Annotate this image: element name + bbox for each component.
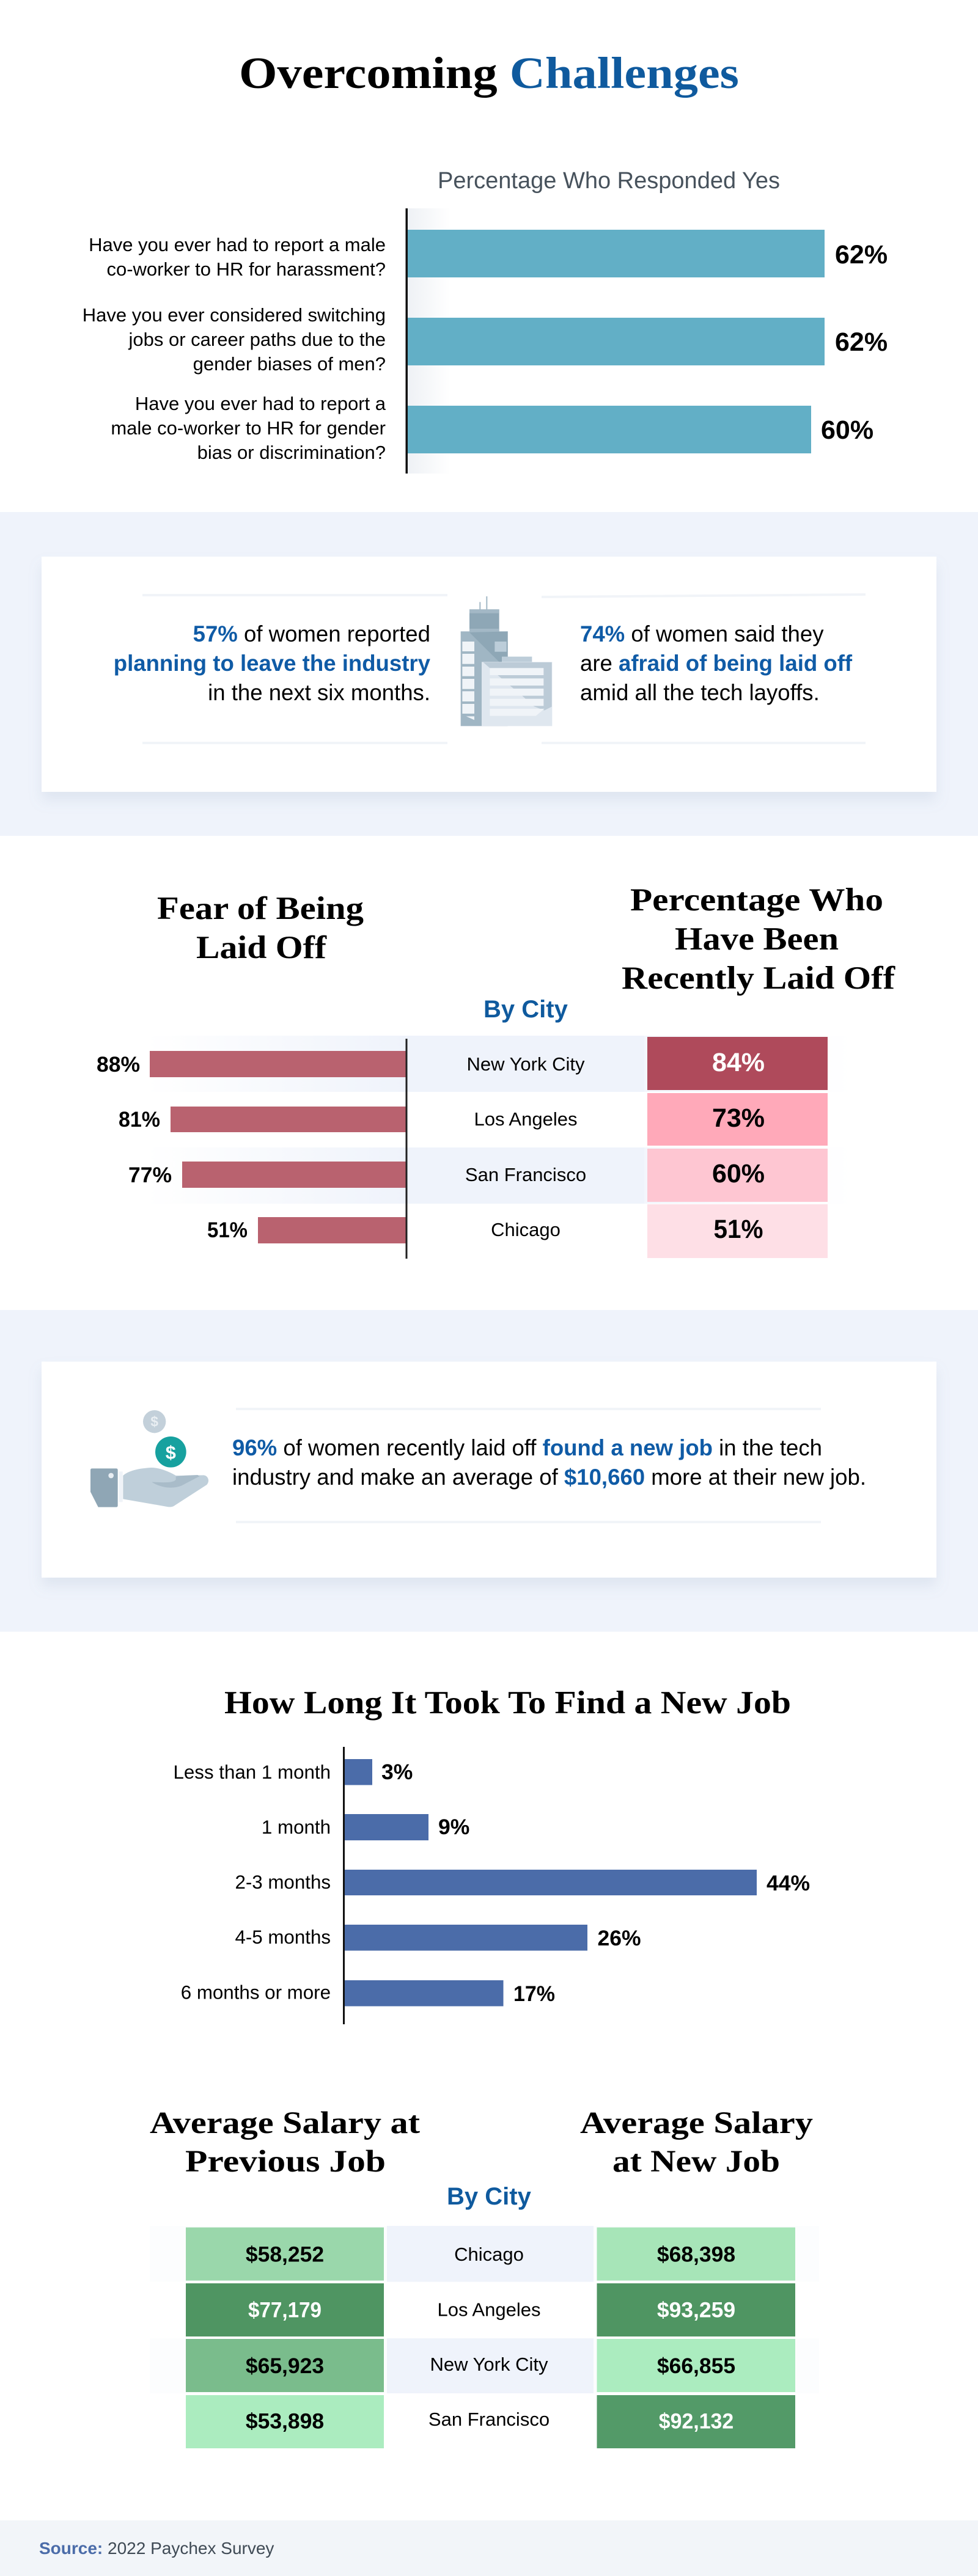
- salary cell: New York City previous: $65,923: [246, 2354, 324, 2378]
- value 88%: 88%: [97, 1052, 140, 1077]
- bar: 2-3 months 44%: [345, 1870, 757, 1895]
- subheading: by city: By City: [483, 996, 568, 1023]
- callout text: 57% planning to leave: planning to leave the industry: [114, 651, 431, 676]
- salary cell: Los Angeles new: [597, 2283, 795, 2336]
- question label 3: male co-worker to HR for gender: [111, 417, 386, 439]
- question label 2: jobs or career paths due to the: [128, 329, 386, 350]
- heat cell: San Francisco 60%: [647, 1149, 828, 1202]
- city label: New York City: New York City: [430, 2354, 548, 2375]
- salary cell: San Francisco previous: [186, 2395, 384, 2448]
- panel: how long it took to find a new job chart: [174, 1685, 810, 2024]
- bar: less than 1 month 3%: [345, 1759, 372, 1785]
- salary cell: Los Angeles previous: [186, 2283, 384, 2336]
- salary cell: Los Angeles new: $93,259: [657, 2297, 735, 2322]
- heading: previous job: Average Salary at: [150, 2106, 420, 2140]
- callout card: [42, 1361, 936, 1578]
- heading: fear of being laid off: Fear of Being: [157, 891, 364, 926]
- label: 6 months or more: 6 months or more: [181, 1982, 331, 2003]
- bar: report harassment 62%: [408, 230, 825, 277]
- callout text: 57% planning to leave: in the next six months.: [208, 680, 430, 705]
- label: 4-5 months: 4-5 months: [235, 1927, 331, 1948]
- salary cell: Chicago new: [597, 2228, 795, 2280]
- heading: percentage recently laid off: Recently Laid Off: [622, 961, 895, 996]
- bar: San Francisco fear 77%: [182, 1162, 406, 1188]
- heat cell: New York City 84%: [647, 1037, 828, 1090]
- subheading: by city: By City: [447, 2183, 532, 2210]
- question label 2: gender biases of men?: [193, 353, 386, 375]
- value 26%: 26%: [598, 1926, 641, 1950]
- salary cell: San Francisco previous: $53,898: [246, 2409, 324, 2433]
- value 62%: 62%: [835, 327, 888, 357]
- salary cell: Los Angeles previous: $77,179: [248, 2297, 322, 2322]
- icon: office buildings: [461, 596, 552, 726]
- heat cell: San Francisco 60%: 60%: [712, 1159, 765, 1188]
- value 9%: 9%: [438, 1815, 469, 1839]
- panel: average salary by city table: [150, 2106, 819, 2448]
- value 44%: 44%: [767, 1871, 810, 1895]
- label: less than 1 month: Less than 1 month: [174, 1762, 331, 1783]
- bar: Los Angeles fear 81%: [171, 1107, 406, 1132]
- heat cell: Los Angeles 73%: [647, 1093, 828, 1146]
- question label 3: Have you ever had to report a: [135, 393, 386, 414]
- city label: Los Angeles: Los Angeles: [438, 2299, 540, 2321]
- value 17%: 17%: [513, 1981, 555, 2006]
- question label 1: Have you ever had to report a male: [89, 234, 386, 255]
- value 81%: 81%: [119, 1107, 160, 1132]
- heading: new job: at New Job: [612, 2145, 780, 2179]
- callout text: 74% afraid of layoffs: amid all the tech layoffs.: [580, 680, 820, 705]
- footer: source: Source: 2022 Paychex Survey: [39, 2539, 274, 2558]
- salary cell: Chicago previous: [186, 2228, 384, 2280]
- callout text: 57% planning to leave: 57% of women reported: [193, 621, 430, 646]
- city label: Chicago: Chicago: [491, 1219, 561, 1240]
- label: 2-3 months: 2-3 months: [235, 1872, 331, 1893]
- heading: percentage recently laid off: Have Been: [675, 921, 839, 957]
- callout text: 96% found a new job: industry and make an average of $10,660 more at their new job.: [232, 1465, 866, 1490]
- heat cell: Chicago 51%: [647, 1204, 828, 1258]
- title: Overcoming Challenges: [239, 48, 739, 98]
- salary cell: New York City new: [597, 2339, 795, 2392]
- icon: hand with coins: $: [166, 1442, 176, 1463]
- heat cell: Chicago 51%: 51%: [714, 1215, 763, 1244]
- value 60%: 60%: [821, 415, 873, 445]
- bar: switching careers 62%: [408, 318, 825, 365]
- icon: hand with coins: $: [150, 1414, 158, 1430]
- city label: Los Angeles: Los Angeles: [474, 1108, 577, 1130]
- label: 1 month: 1 month: [262, 1817, 331, 1838]
- salary cell: New York City new: $66,855: [657, 2354, 735, 2378]
- bar: 4-5 months 26%: [345, 1925, 587, 1950]
- callout text: 96% found a new job: 96% of women recently laid off found a new job in the tech: [232, 1435, 822, 1460]
- salary cell: Chicago previous: $58,252: [246, 2242, 324, 2267]
- heading: How Long It Took To Find a New Job: [224, 1685, 791, 1721]
- heading: new job: Average Salary: [580, 2106, 813, 2140]
- heat cell: New York City 84%: 84%: [712, 1048, 765, 1077]
- city label: New York City: New York City: [467, 1053, 585, 1075]
- heat cell: Los Angeles 73%: 73%: [712, 1103, 765, 1133]
- heading: fear of being laid off: Laid Off: [196, 930, 327, 965]
- bar: 1 month 9%: [345, 1814, 428, 1840]
- salary cell: New York City previous: [186, 2339, 384, 2392]
- question label 3: bias or discrimination?: [197, 442, 386, 463]
- panel: industry callout background: [0, 512, 978, 836]
- panel: new job callout background: [0, 1310, 978, 1631]
- salary cell: Chicago new: $68,398: [657, 2242, 735, 2267]
- footer: source: [0, 2520, 978, 2576]
- bar: New York City fear 88%: [150, 1051, 406, 1077]
- value 3%: 3%: [381, 1760, 413, 1784]
- question label 1: co-worker to HR for harassment?: [106, 258, 386, 280]
- chart subtitle: Percentage Who Responded Yes: [438, 168, 780, 194]
- panel: fear of being laid off by city: [97, 882, 895, 1259]
- bar: report bias 60%: [408, 406, 811, 453]
- callout text: 74% afraid of layoffs: 74% of women said they: [580, 621, 824, 646]
- callout text: 74% afraid of layoffs: are afraid of being laid off: [580, 651, 852, 676]
- bar: Chicago fear 51%: [258, 1217, 406, 1243]
- city label: San Francisco: San Francisco: [465, 1164, 586, 1185]
- icon: hand with coins: [90, 1410, 208, 1507]
- panel: percentage who responded yes chart: [83, 168, 888, 474]
- value 51%: 51%: [207, 1218, 248, 1242]
- question label 2: Have you ever considered switching: [83, 304, 386, 326]
- heading: percentage recently laid off: Percentage Who: [630, 882, 883, 918]
- callout card: [42, 557, 936, 792]
- salary cell: San Francisco new: [597, 2395, 795, 2448]
- heading: previous job: Previous Job: [185, 2145, 386, 2179]
- city label: Chicago: Chicago: [454, 2244, 524, 2265]
- value 77%: 77%: [128, 1163, 172, 1187]
- city label: San Francisco: San Francisco: [428, 2409, 550, 2430]
- value 62%: 62%: [835, 240, 888, 269]
- bar: 6 months or more 17%: [345, 1980, 504, 2007]
- salary cell: San Francisco new: $92,132: [659, 2409, 734, 2433]
